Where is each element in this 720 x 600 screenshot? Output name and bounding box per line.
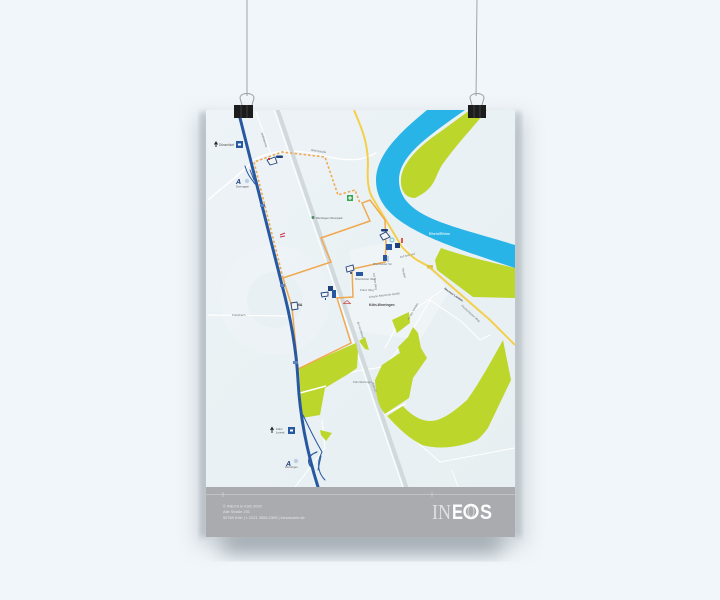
hanging wire left <box>246 0 248 96</box>
road labels: Bahnstr. <box>371 382 378 393</box>
footer address <box>223 504 305 520</box>
first aid icon <box>347 195 353 201</box>
road labels: Fischerhauser Weg <box>460 304 481 323</box>
road labels: Am Kirchberg <box>356 321 365 339</box>
INEOS logo <box>432 500 492 524</box>
plant marker central <box>346 265 363 276</box>
junction Dormagen: Dormagen <box>236 184 250 188</box>
station label: Worringen Chempark <box>316 216 343 220</box>
road labels: Krebsbach <box>232 313 246 317</box>
plant marker west-central <box>321 286 336 300</box>
poster <box>206 108 515 537</box>
road labels: Rheinfelder Str. <box>373 262 393 266</box>
road labels: Kranz Weg <box>360 288 374 292</box>
white roads <box>208 112 515 487</box>
footer address: 50769 Köln | t. 0221 3555-2309 | ineoskoeln.de <box>223 515 305 520</box>
yellow main road <box>354 110 515 345</box>
road labels: Johann-Nepomuk-Straße <box>369 291 401 299</box>
junction Worringen <box>285 459 298 469</box>
INEOS logo: S <box>480 501 492 524</box>
binder clip left <box>234 94 254 118</box>
INEOS logo: IN <box>432 500 451 524</box>
junction Dormagen: A <box>235 179 241 186</box>
road labels: Rheinfelder Weg <box>355 277 376 281</box>
junction 6A marker <box>291 302 303 310</box>
road labels: Rheinstraße <box>311 148 327 154</box>
road labels: An den Weiden <box>406 302 420 320</box>
binder clip right <box>468 94 486 118</box>
green areas <box>299 110 515 447</box>
river label: Rhein/Rhine <box>429 232 450 236</box>
junction 6A marker: 6A <box>298 303 303 307</box>
railway <box>277 108 407 489</box>
footer <box>206 487 515 537</box>
road labels: Auf dem Berg <box>372 273 378 291</box>
Köln Leverkusen direction <box>270 427 295 434</box>
river Rhein <box>376 110 515 268</box>
road labels: Hauptstr. <box>401 267 407 279</box>
poster shadow <box>196 112 526 554</box>
parking and plant markers north <box>267 156 283 165</box>
plant cluster east <box>380 229 403 262</box>
road labels: Köln-Worringen <box>353 380 373 384</box>
hanging wire right <box>476 0 477 96</box>
red marker <box>280 233 285 237</box>
route badge <box>427 265 433 268</box>
orange solid route <box>283 200 386 369</box>
INEOS logo: E <box>452 501 463 524</box>
autobahn <box>238 110 325 487</box>
road labels: Mathildenstr. <box>260 132 269 149</box>
footer address: © INEOS in Köln 2020 <box>223 504 263 508</box>
junction Worringen: A <box>285 461 291 468</box>
junction Worringen: Worringen <box>285 465 298 469</box>
road labels: Auf dem Hof <box>399 252 416 259</box>
Köln Leverkusen direction: Leverk. <box>276 430 285 434</box>
road labels: Neusser Landstr. <box>443 287 465 303</box>
map panel <box>206 108 515 489</box>
footer address: Alte Straße 201 <box>223 509 250 514</box>
junction Dormagen <box>235 179 250 188</box>
orange dotted route <box>254 152 360 278</box>
Düsseldorf direction <box>214 141 243 148</box>
Köln Leverkusen direction: Köln/ <box>276 427 283 431</box>
road labels <box>232 132 481 393</box>
town label: Köln-Worringen <box>369 303 395 307</box>
Düsseldorf direction: Düsseldorf <box>219 143 234 147</box>
warning triangle <box>344 300 350 304</box>
